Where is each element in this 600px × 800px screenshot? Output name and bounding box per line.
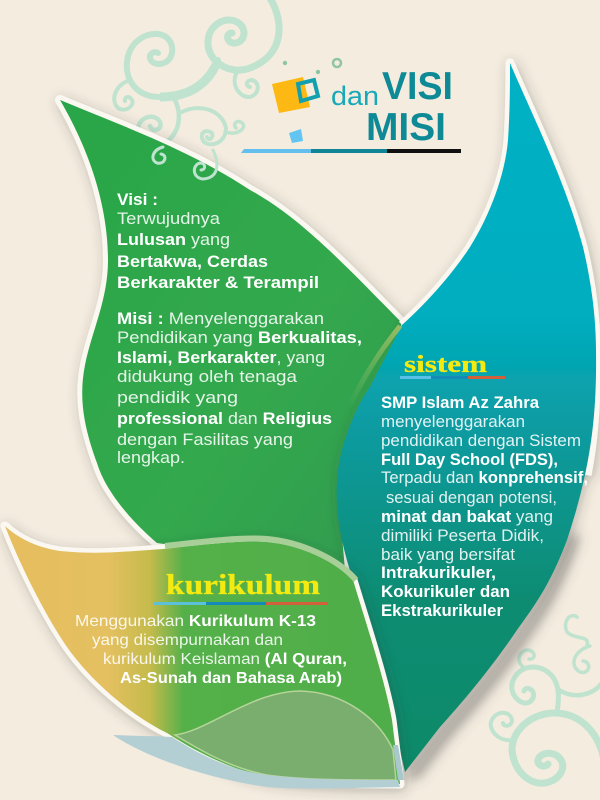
title block: visi dan misi — [241, 59, 461, 153]
icon: teal frame — [298, 80, 318, 101]
heading: sistem: sistem — [404, 352, 487, 378]
sistem text block: Terpadu dan konprehensif, — [381, 469, 588, 487]
visi misi text block: Bertakwa, Cerdas — [117, 252, 268, 271]
heading: kurikulum: kurikulum — [166, 570, 320, 601]
visi misi text block: Visi : — [117, 190, 158, 209]
icon: decorative dots — [283, 59, 341, 74]
sistem underline — [400, 376, 505, 379]
visi misi text block: dengan Fasilitas yang — [117, 430, 293, 449]
visi misi text block: Islami, Berkarakter , yang — [117, 348, 325, 367]
sistem text block: pendidikan dengan Sistem — [381, 432, 581, 450]
title word: MISI: MISI — [366, 106, 446, 149]
visi misi text block: Pendidikan yang Berkualitas, — [117, 328, 362, 347]
visi misi text block — [117, 190, 362, 467]
icon: blue square — [289, 129, 303, 143]
green leaf: visi misi — [60, 100, 402, 570]
icon: yellow square — [272, 77, 310, 113]
visi misi text block: Misi : Menyelenggarakan — [117, 309, 324, 328]
kurikulum text block — [75, 613, 347, 687]
sistem text block: sesuai dengan potensi, — [386, 489, 557, 507]
sistem text block: Full Day School (FDS), — [381, 451, 558, 469]
visi misi text block: Lulusan yang — [117, 230, 230, 249]
kurikulum leaf — [5, 526, 404, 789]
kurikulum text block: As-Sunah dan Bahasa Arab) — [120, 670, 342, 687]
visi misi text block: Terwujudnya — [117, 209, 221, 228]
kurikulum text block: Menggunakan Kurikulum K-13 — [75, 613, 316, 630]
sistem text block: Kokurikuler dan — [381, 583, 510, 601]
leaf fold: translucent highlight — [165, 539, 356, 580]
sistem text block: dimiliki Peserta Didik, — [381, 527, 544, 545]
sistem text block: Ekstrakurikuler — [381, 602, 504, 620]
visi misi text block: Berkarakter & Terampil — [117, 273, 319, 292]
kurikulum underline — [154, 602, 328, 605]
leaf fold: lower curl — [175, 691, 396, 780]
teal leaf: pale edge strip — [350, 326, 400, 405]
kurikulum text block: yang disempurnakan dan — [92, 632, 283, 649]
teal leaf: lower right shadow — [412, 535, 575, 778]
visi misi text block: didukung oleh tenaga — [117, 367, 298, 386]
sistem text block: menyelenggarakan — [381, 413, 525, 431]
leaf fold: blue under-layer — [113, 735, 400, 789]
sistem text block: SMP Islam Az Zahra — [381, 394, 540, 412]
title word: dan: dan — [331, 81, 379, 111]
sistem text block: minat dan bakat yang — [381, 508, 553, 526]
visi misi text block: pendidik yang — [117, 388, 238, 407]
visi misi text block: lengkap. — [117, 448, 185, 467]
teal leaf: sistem — [337, 63, 596, 772]
title word: VISI: VISI — [382, 65, 453, 108]
visi misi text block: professional dan Religius — [117, 409, 332, 428]
swirl ornament: top — [114, 0, 279, 144]
kurikulum text block: kurikulum Keislaman (Al Quran, — [103, 651, 347, 668]
sistem text block: baik yang bersifat — [381, 546, 515, 564]
sistem text block: Intrakurikuler, — [381, 564, 496, 582]
swirl ornament: bottom right — [491, 616, 600, 783]
sistem text block — [381, 394, 588, 620]
swirl tips over green — [153, 147, 217, 179]
title underline — [241, 149, 461, 153]
